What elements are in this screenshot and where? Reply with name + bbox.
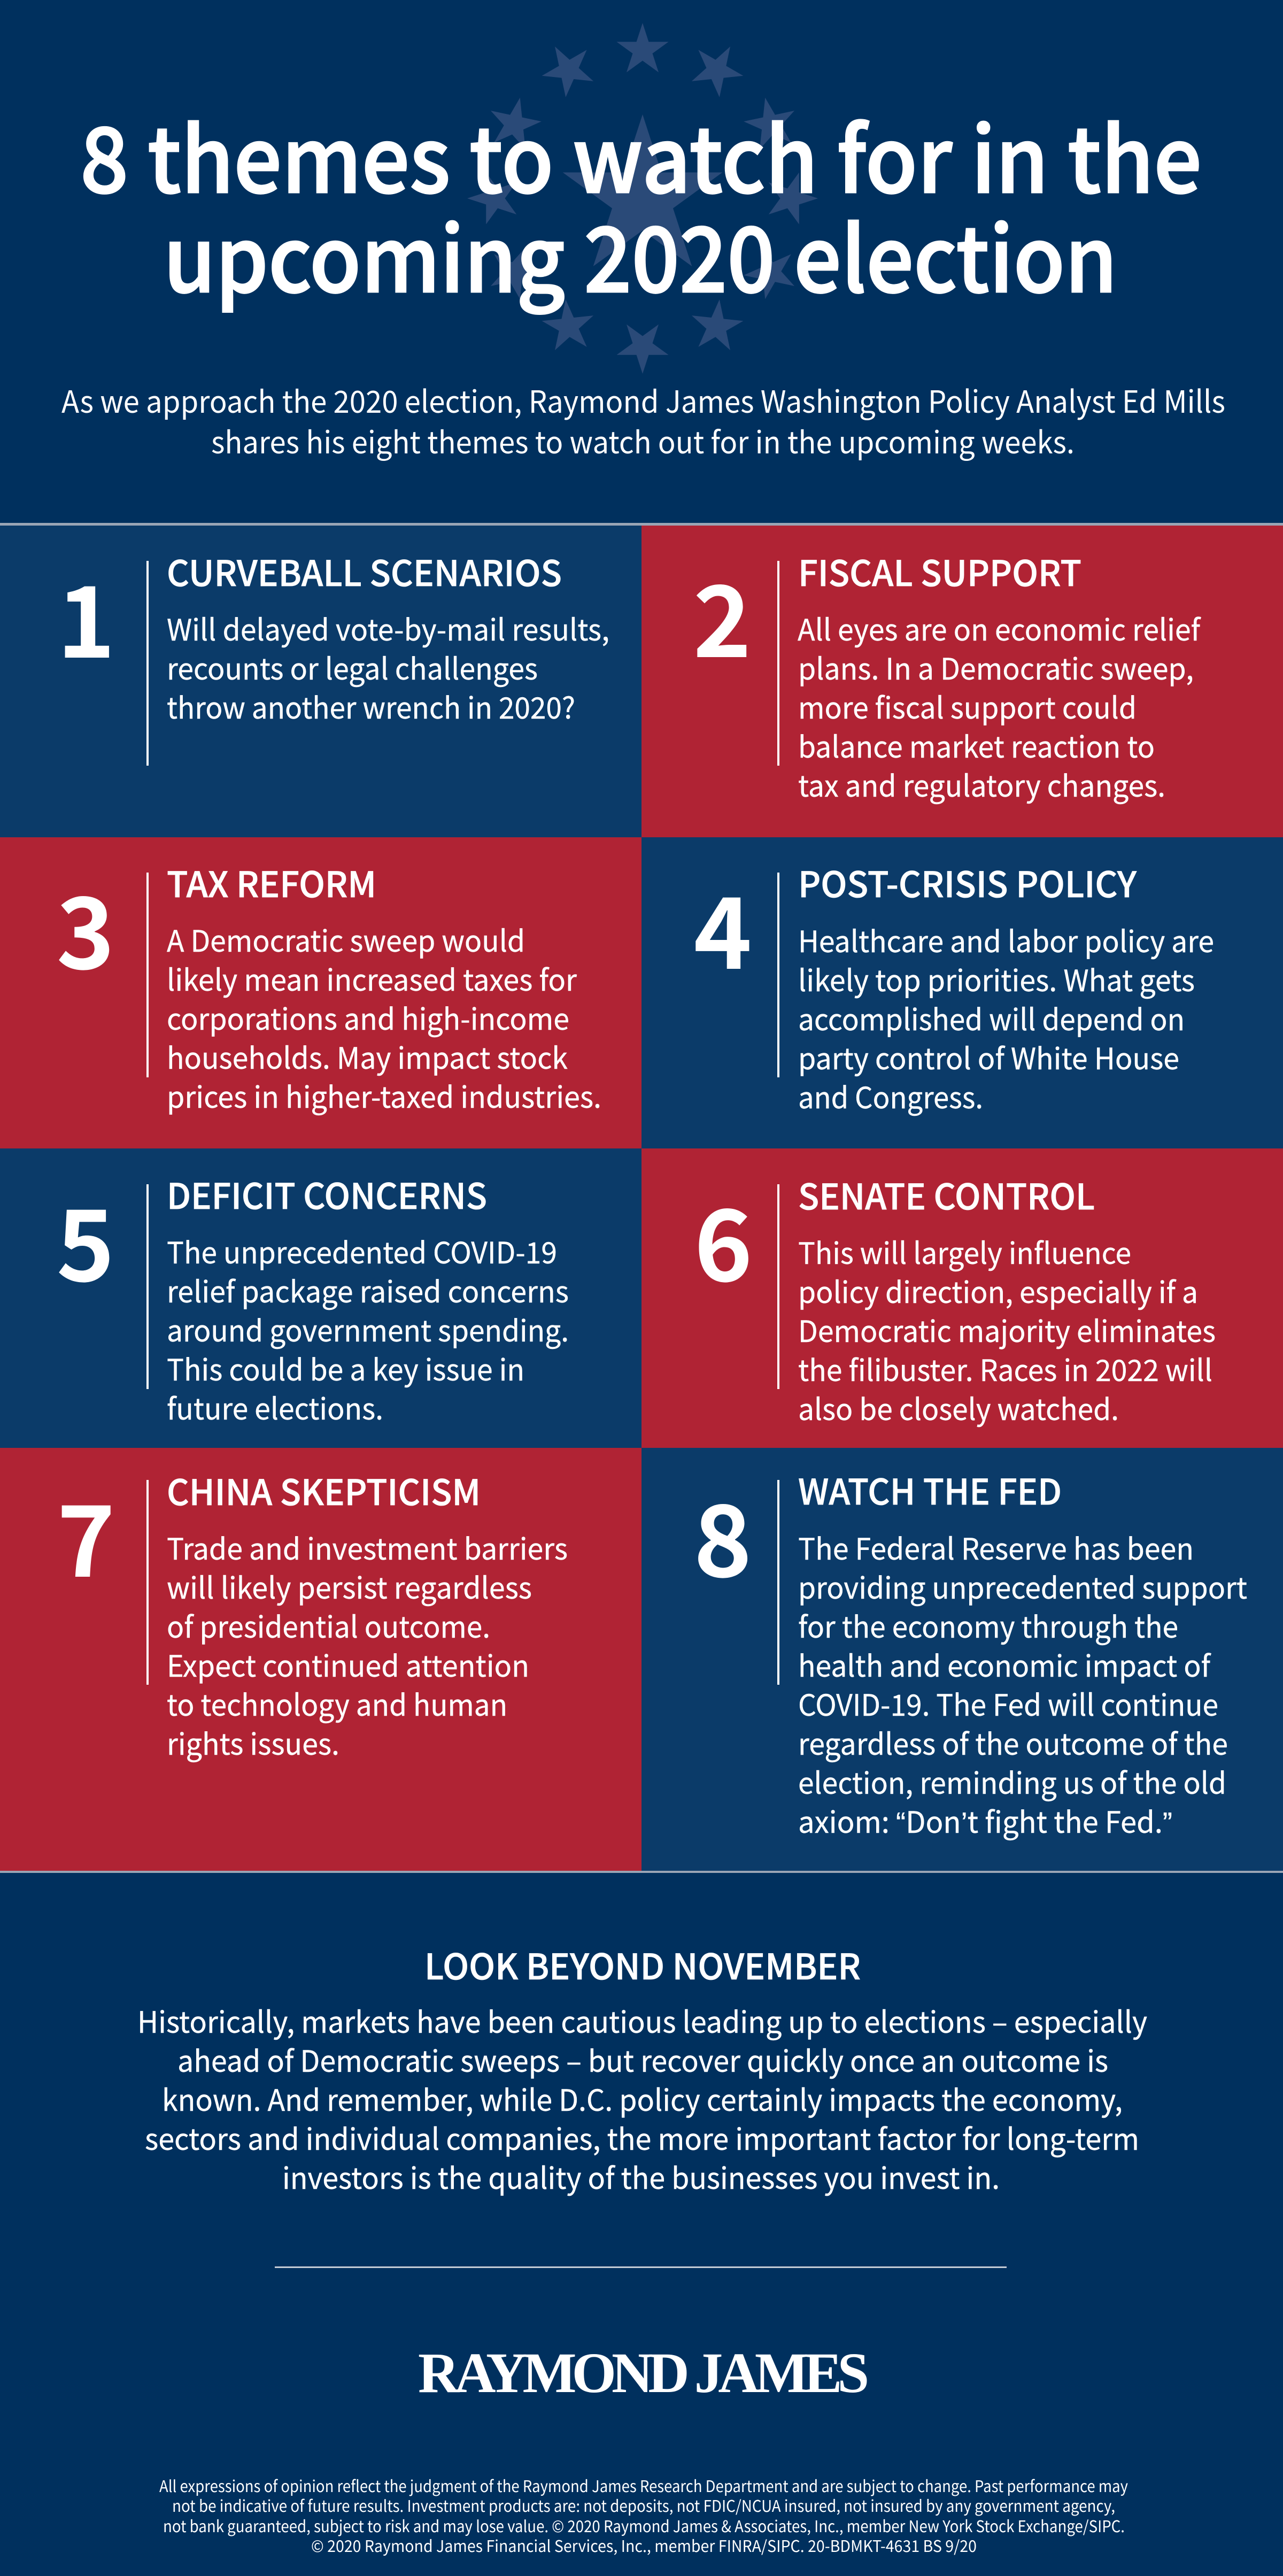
body 3: households. May impact stock [167,1035,568,1077]
logo: Raymond James: RAYMOND JAMES [418,2342,869,2405]
body 7: to technology and human [167,1682,507,1724]
body 4: likely top priorities. What gets [798,957,1195,1000]
body 6: Democratic majority eliminates [798,1308,1216,1351]
heading 5: DEFICIT CONCERNS [167,1168,487,1220]
panel 6: senate control [642,1148,1283,1448]
body 4: and Congress. [798,1074,983,1117]
heading 4: POST-CRISIS POLICY [798,857,1137,908]
body 2: tax and regulatory changes. [798,762,1165,805]
body 2: more fiscal support could [798,684,1137,727]
heading 3: TAX REFORM [167,857,376,908]
panel 1: curveball scenarios [0,526,642,837]
body 3: A Democratic sweep would [167,917,525,960]
body 4 [798,918,1214,1117]
heading 2: FISCAL SUPPORT [798,545,1081,597]
panel 2: fiscal support [642,526,1283,837]
body 3 [167,917,601,1116]
intro text: shares his eight themes to watch out for in the upcoming weeks. [211,419,1075,462]
body 2 [798,606,1201,805]
body 8: regardless of the outcome of the [798,1721,1228,1763]
heading 1: CURVEBALL SCENARIOS [167,545,562,597]
heading 6: SENATE CONTROL [798,1169,1095,1220]
body 4: accomplished will depend on [798,996,1185,1039]
body 5: relief package raised concerns [167,1268,569,1311]
heading 8: WATCH THE FED [798,1464,1062,1515]
body 3: corporations and high-income [167,996,569,1038]
panel 5: deficit concerns [0,1148,642,1448]
body 6: This will largely influence [798,1230,1131,1272]
title: upcoming 2020 election [164,188,1117,318]
body 7: of presidential outcome. [167,1603,490,1646]
body 2: plans. In a Democratic sweep, [798,645,1194,688]
body 2: All eyes are on economic relief [798,606,1201,649]
body 5: The unprecedented COVID-19 [167,1229,557,1272]
number 2: 2 [693,543,752,686]
section body: Historically, markets have been cautious leading up to elections – especially [137,1999,1147,2041]
body 5 [167,1229,569,1428]
disclaimer: not bank guaranteed, subject to risk and may lose value. © 2020 Raymond James & Associates, Inc., member New York Stock Exchange/SIPC. [163,2513,1125,2537]
disclaimer: not be indicative of future results. Investment products are: not deposits, not FDIC/NCUA insured, not insured by any government agency, [172,2493,1115,2517]
body 8: axiom: “Don’t fight the Fed.” [798,1799,1172,1841]
panel 4: post-crisis policy [642,837,1283,1148]
body 5: This could be a key issue in [167,1346,524,1389]
number 6: 6 [694,1167,753,1310]
intro text [61,378,1225,462]
body 8: for the economy through the [798,1603,1178,1646]
body 6: also be closely watched. [798,1386,1119,1429]
body 8: providing unprecedented support [798,1564,1247,1607]
panel 8: watch the fed [642,1448,1283,1871]
intro text: As we approach the 2020 election, Raymond James Washington Policy Analyst Ed Mills [61,378,1225,422]
panel 3: tax reform [0,837,642,1148]
body 8 [798,1525,1247,1841]
number 7: 7 [57,1462,115,1606]
title [80,89,1202,318]
section: look beyond november [137,1939,1147,2197]
body 4: Healthcare and labor policy are [798,918,1214,961]
body 1: Will delayed vote-by-mail results, [167,606,609,649]
panel 7: china skepticism [0,1448,642,1871]
body 4: party control of White House [798,1035,1179,1078]
body 7: rights issues. [167,1721,339,1763]
title: 8 themes to watch for in the [80,89,1202,219]
number 4: 4 [693,854,752,998]
heading 7: CHINA SKEPTICISM [167,1464,481,1516]
body 5: future elections. [167,1385,383,1428]
number 1: 1 [57,543,115,687]
body 1: recounts or legal challenges [167,645,538,688]
body 3: prices in higher-taxed industries. [167,1074,601,1116]
section body [137,1999,1147,2197]
body 2: balance market reaction to [798,723,1155,766]
body 7: Trade and investment barriers [167,1525,568,1568]
disclaimer [159,2473,1128,2557]
number 3: 3 [56,854,115,998]
section body: sectors and individual companies, the more important factor for long-term [145,2116,1139,2158]
body 6: the filibuster. Races in 2022 will [798,1347,1212,1390]
body 6: policy direction, especially if a [798,1269,1198,1312]
stars emblem [467,23,818,374]
disclaimer: © 2020 Raymond James Financial Services, Inc., member FINRA/SIPC. 20-BDMKT-4631 BS 9/20 [311,2533,977,2557]
disclaimer: All expressions of opinion reflect the judgment of the Raymond James Research Department and are subject to change. Past performance may [159,2473,1128,2497]
body 7 [167,1525,568,1763]
number 5: 5 [56,1167,115,1310]
body 8: COVID-19. The Fed will continue [798,1682,1218,1724]
section body: investors is the quality of the businesses you invest in. [282,2155,1000,2197]
body 1 [167,606,609,727]
body 8: election, reminding us of the old [798,1760,1226,1802]
section body: known. And remember, while D.C. policy certainly impacts the economy, [162,2077,1123,2119]
body 8: The Federal Reserve has been [798,1525,1194,1568]
body 3: likely mean increased taxes for [167,957,577,999]
section body: ahead of Democratic sweeps – but recover quickly once an outcome is [177,2038,1108,2080]
body 7: will likely persist regardless [167,1564,532,1607]
body 7: Expect continued attention [167,1642,529,1685]
body 5: around government spending. [167,1307,569,1350]
number 8: 8 [693,1462,752,1606]
section heading: LOOK BEYOND NOVEMBER [424,1939,861,1990]
body 1: throw another wrench in 2020? [167,684,575,727]
body 6 [798,1230,1216,1429]
body 8: health and economic impact of [798,1642,1211,1685]
header section [61,23,1225,462]
